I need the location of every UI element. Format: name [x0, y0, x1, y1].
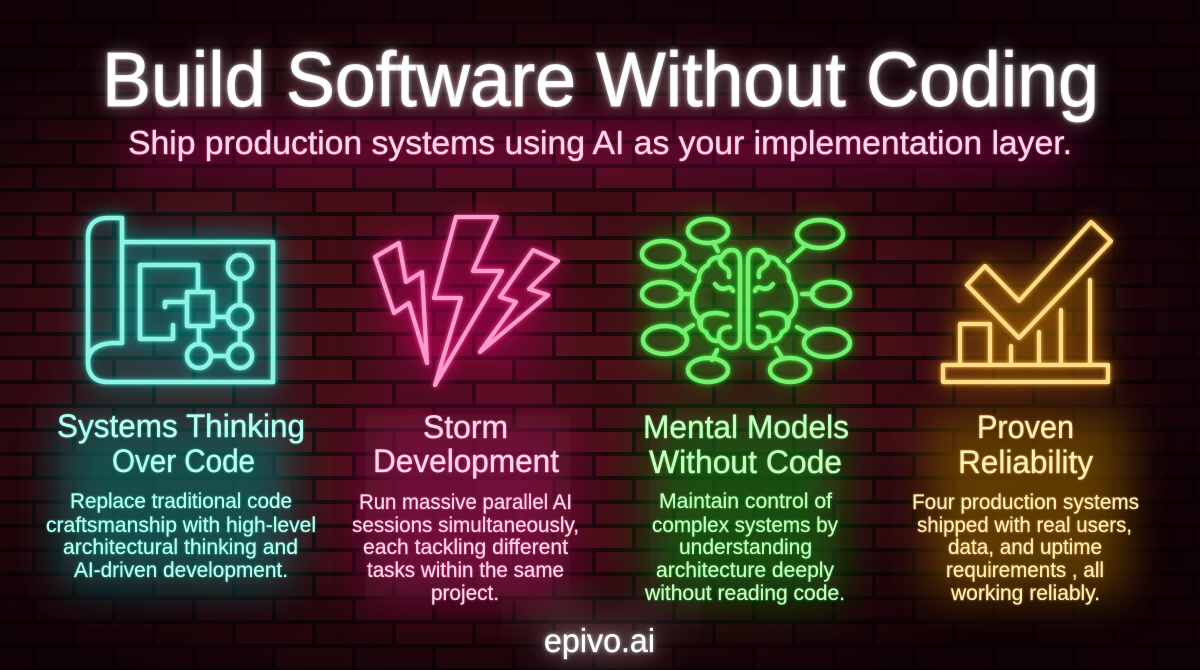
heading: systems thinking over code: Over Code [112, 443, 255, 479]
body text: proven reliability: Four production systems [912, 491, 1139, 514]
icon: checkmark over bar chart [943, 222, 1111, 382]
body text: proven reliability: working reliably. [950, 582, 1100, 605]
heading: mental models without code: Without Code [649, 444, 842, 480]
heading: proven reliability [958, 409, 1093, 480]
heading: mental models without code: Mental Models [643, 409, 849, 445]
body text: mental models [644, 490, 845, 605]
heading: mental models without code [643, 409, 849, 480]
body text: storm development: sessions simultaneously, [352, 514, 579, 537]
heading: systems thinking over code: Systems Thinking [57, 408, 305, 444]
body text: mental models: complex systems by [652, 514, 838, 537]
panel: proven reliability [912, 222, 1139, 605]
body text: proven reliability: shipped with real users, [917, 514, 1132, 537]
title: Build Software Without Coding [102, 37, 1099, 123]
heading: systems thinking over code [57, 408, 305, 479]
body text: storm development: project. [431, 582, 499, 605]
body text: storm development: tasks within the same [367, 559, 564, 582]
heading: storm development [373, 409, 559, 479]
body text: proven reliability: data, and uptime [948, 536, 1102, 559]
body text: systems thinking: architectural thinking and [63, 536, 298, 559]
heading: proven reliability: Reliability [958, 444, 1093, 480]
body text: storm development: each tackling different [363, 536, 568, 559]
body text: proven reliability [912, 491, 1139, 605]
body text: mental models: Maintain control of [659, 490, 832, 513]
panel: storm development [352, 217, 579, 605]
icon: lightning bolts [375, 217, 558, 385]
body text: systems thinking [46, 490, 316, 582]
body text: proven reliability: requirements , all [946, 559, 1104, 582]
body text: systems thinking: craftsmanship with high-level [46, 514, 316, 537]
heading: storm development: Storm [423, 409, 508, 445]
panel: systems thinking over code [46, 218, 316, 582]
body text: mental models: architecture deeply [656, 559, 834, 582]
body text: storm development [352, 491, 579, 605]
heading: proven reliability: Proven [977, 409, 1074, 445]
body text: systems thinking: AI-driven development. [74, 559, 288, 582]
body text: systems thinking: Replace traditional code [70, 490, 292, 513]
body text: mental models: understanding [679, 536, 812, 559]
body text: mental models: without reading code. [644, 582, 845, 605]
body text: storm development: Run massive parallel AI [359, 491, 572, 514]
subtitle: Ship production systems using AI as your implementation layer. [128, 125, 1072, 162]
icon: blueprint [88, 218, 273, 382]
panel: mental models without code [642, 219, 850, 605]
heading: storm development: Development [373, 443, 559, 479]
footer brand: epivo.ai [544, 622, 655, 659]
icon: brain with nodes [642, 219, 850, 382]
